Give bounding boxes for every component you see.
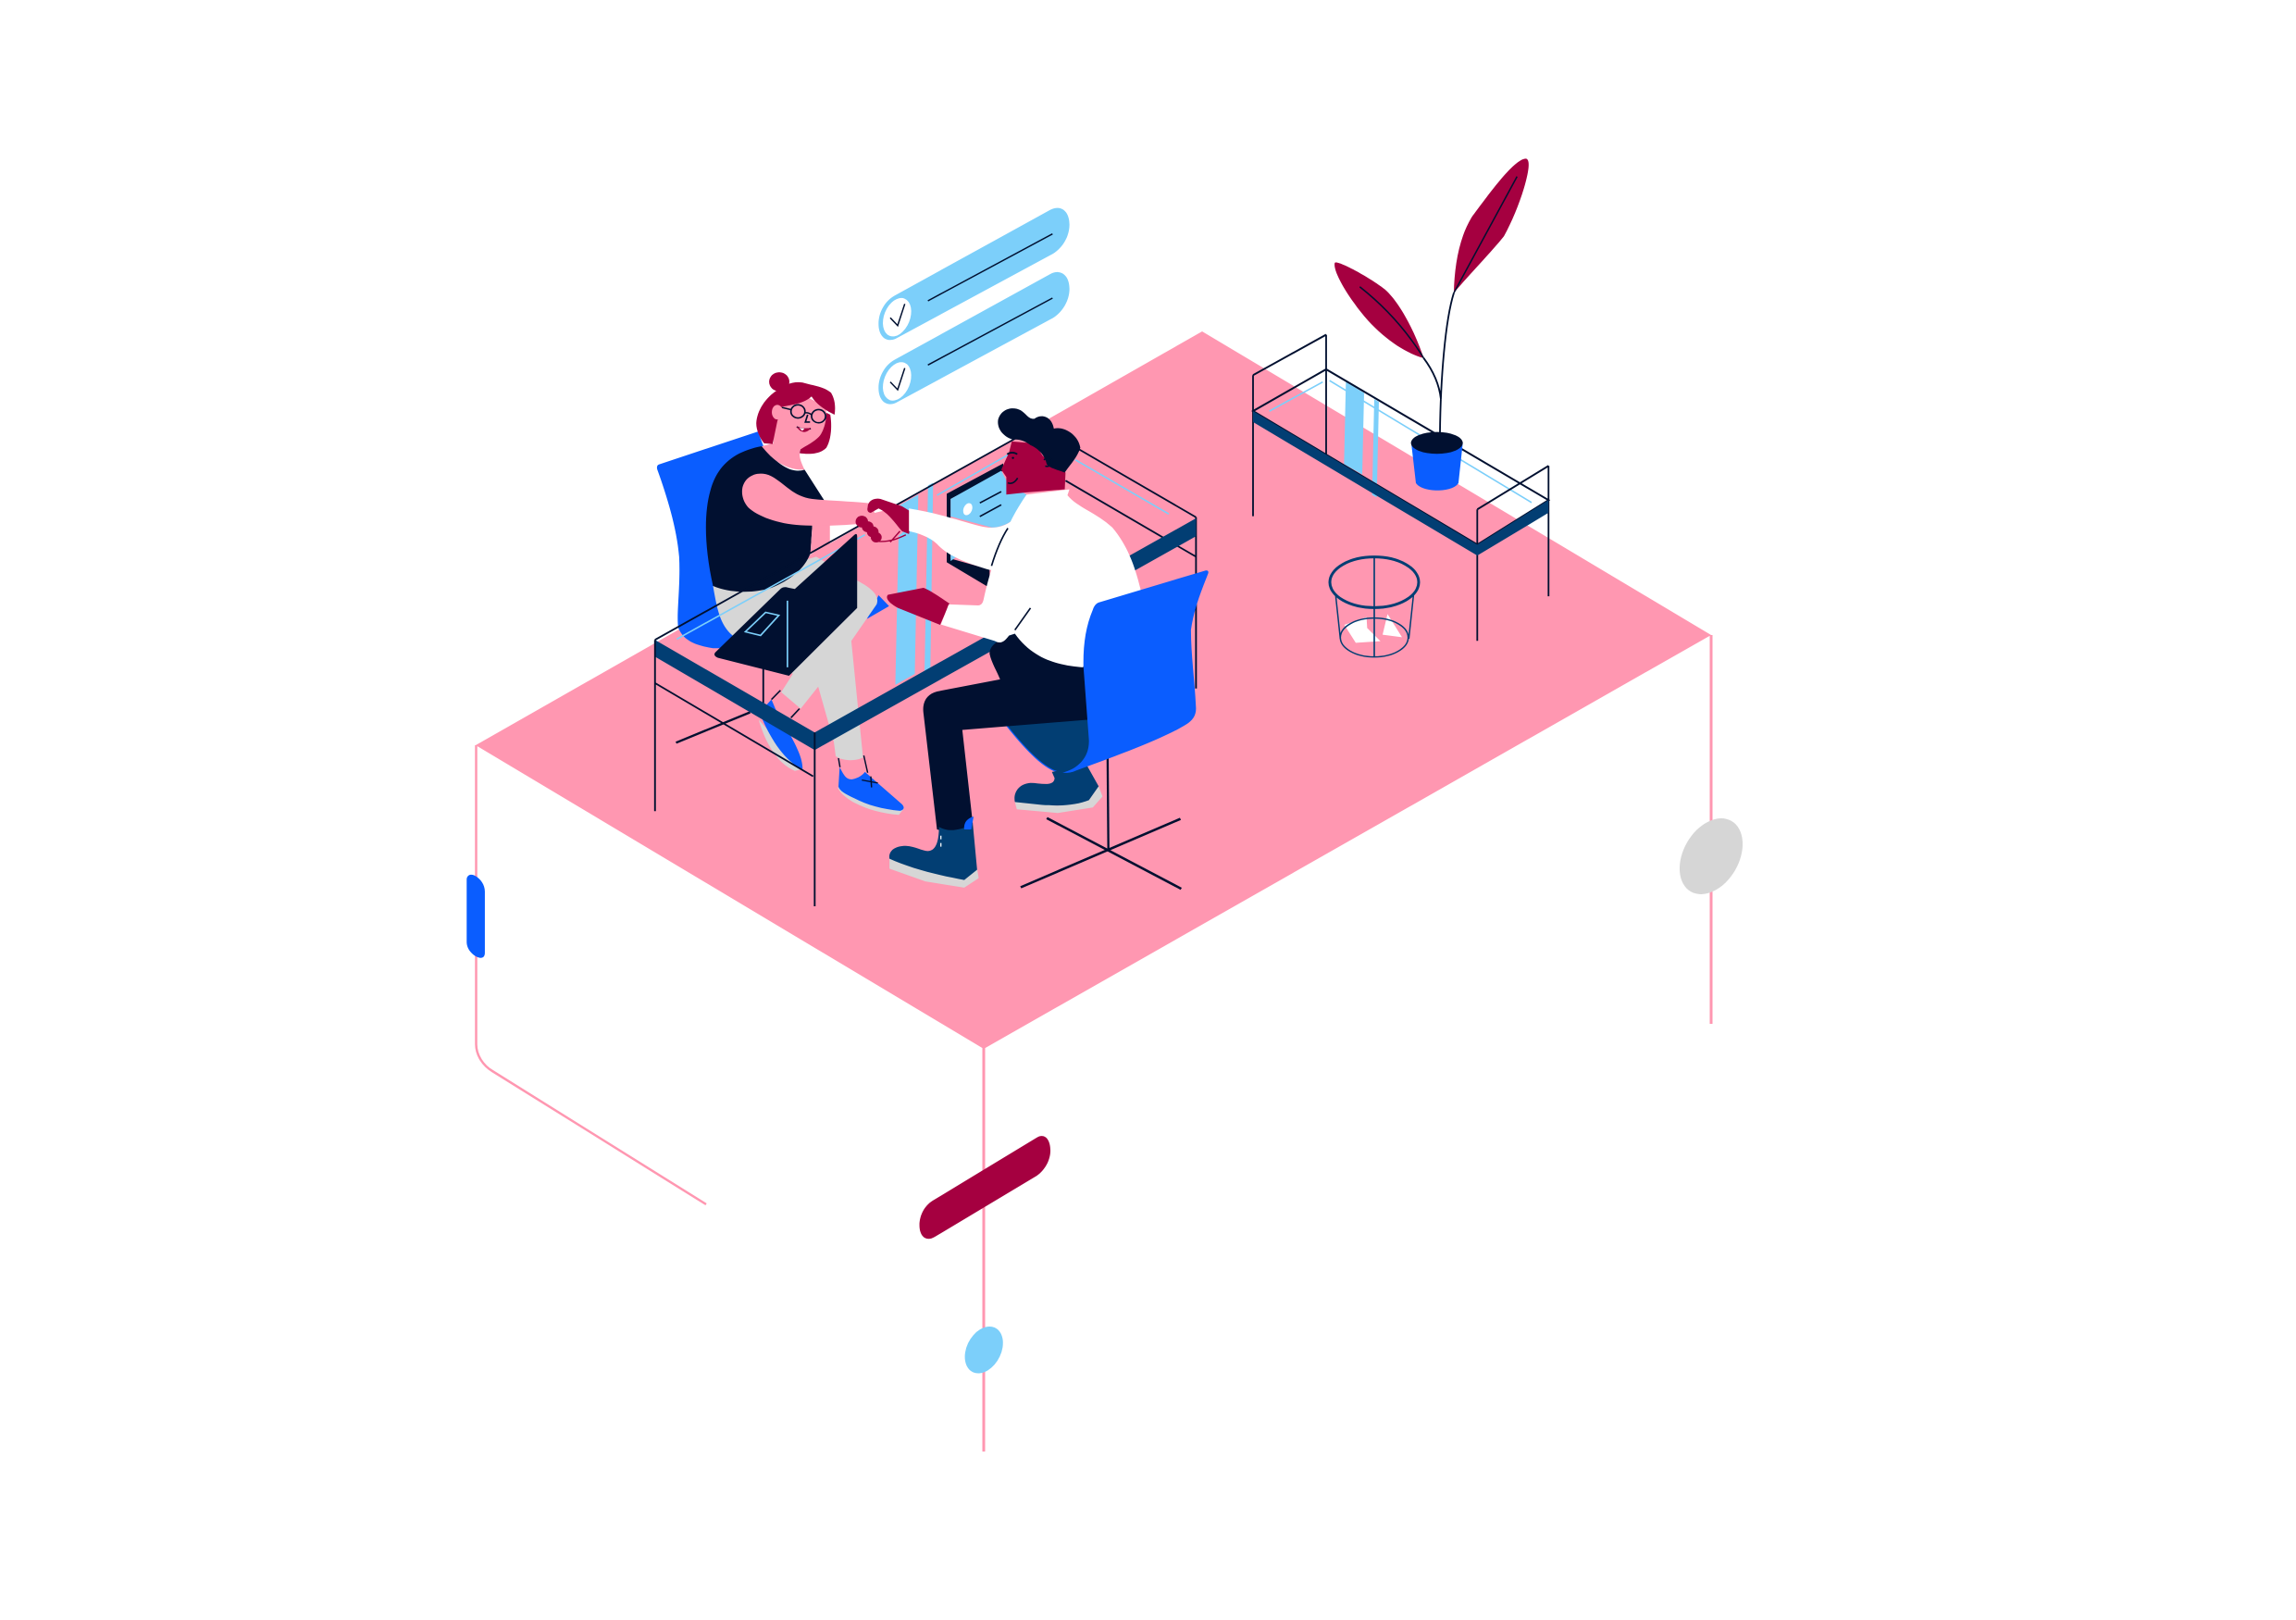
man's rear leg under seat bbox=[1006, 717, 1091, 773]
desk top outline bbox=[655, 426, 1038, 640]
desk front band bbox=[655, 518, 1196, 750]
shelf light blue reflections bbox=[1270, 380, 1532, 503]
woman far shoe bbox=[759, 700, 802, 771]
woman's chest patch bbox=[811, 525, 830, 554]
woman's chair base lines bbox=[676, 668, 800, 742]
man's trousers bbox=[924, 633, 1089, 831]
man's head bbox=[998, 408, 1080, 494]
desk legs and rail bbox=[655, 640, 814, 906]
gray oval bbox=[1667, 807, 1756, 905]
pink floor plate bbox=[476, 331, 1711, 1049]
man's shirt crease lines bbox=[991, 529, 1031, 630]
right pink guide line bbox=[1710, 635, 1712, 1024]
check pill two bbox=[877, 272, 1070, 405]
left pink guide line bbox=[476, 745, 706, 1204]
floating shapes on guide lines bbox=[466, 875, 1050, 1379]
blue pill bbox=[466, 875, 485, 958]
shelf frame bbox=[1253, 335, 1548, 641]
man's chair bbox=[1062, 570, 1209, 773]
crumpled paper bbox=[1345, 614, 1402, 642]
man's near boot bbox=[889, 816, 979, 888]
man's rear boot bbox=[1014, 766, 1102, 813]
light blue oval bbox=[958, 1321, 1011, 1379]
woman near shoe bbox=[838, 755, 904, 815]
plant bbox=[1334, 158, 1529, 433]
desk light blue reflections bbox=[895, 455, 1169, 685]
wastebasket bbox=[1330, 557, 1419, 657]
woman's arm bbox=[742, 474, 878, 535]
woman blue shoe detail behind knee bbox=[867, 595, 889, 619]
main scene: desk and two people bbox=[655, 372, 1209, 906]
man's extended arm bbox=[909, 505, 1035, 571]
chair pole and base bbox=[1021, 754, 1181, 889]
woman's torso bbox=[706, 446, 824, 592]
checklist speech pills bbox=[877, 208, 1070, 405]
basket wire frame bbox=[1330, 557, 1419, 657]
check pill one bbox=[877, 208, 1070, 341]
side shelf with plant bbox=[1253, 158, 1548, 641]
shelf front band bbox=[1253, 411, 1548, 555]
desk back frame lines bbox=[1038, 426, 1196, 689]
woman's trousers bbox=[713, 556, 877, 760]
man's near hand bbox=[887, 588, 949, 625]
woman's chair bbox=[657, 431, 770, 648]
laptop bbox=[714, 534, 857, 676]
monitor bbox=[947, 464, 1029, 588]
center pink guide line bbox=[983, 1048, 985, 1452]
woman's neck and head bbox=[756, 372, 835, 469]
handshake bbox=[856, 499, 912, 542]
crimson pill bbox=[920, 1136, 1050, 1239]
plant pot bbox=[1411, 432, 1463, 491]
man's torso bbox=[941, 490, 1141, 667]
